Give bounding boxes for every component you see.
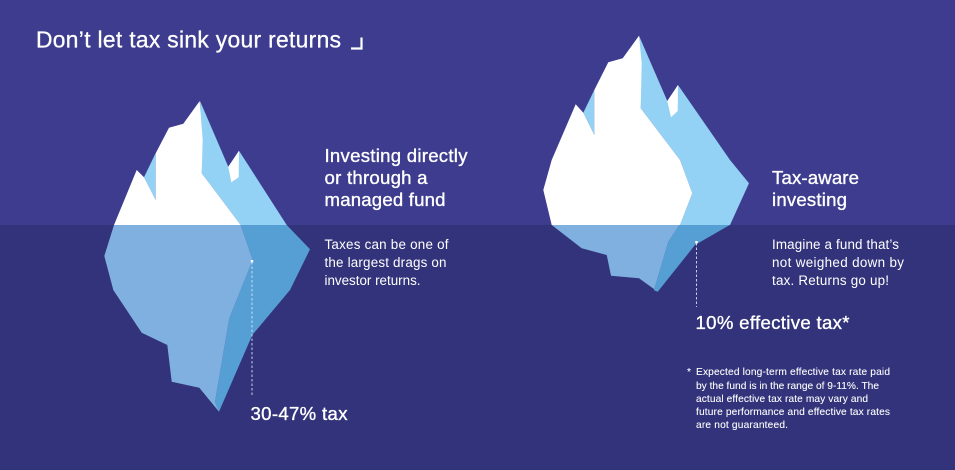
- heading: tax-aware investing: investing: [772, 189, 847, 210]
- heading: investing directly: managed fund: [324, 189, 446, 210]
- icon: corner bracket: [351, 38, 362, 48]
- text block: imagine a fund: Imagine a fund that’s: [772, 237, 899, 252]
- title: Don’t let tax sink your returns: [36, 26, 341, 52]
- text block: taxes drag: investor returns.: [324, 273, 420, 288]
- footnote: are not guaranteed.: [696, 420, 788, 431]
- footnote: actual effective tax rate may vary and: [696, 394, 868, 405]
- footnote: *: [687, 367, 691, 378]
- text block: imagine a fund: [772, 237, 904, 288]
- label: 10% effective tax: 10% effective tax*: [696, 312, 850, 333]
- text block: imagine a fund: not weighed down by: [772, 255, 904, 270]
- iceberg: right: [543, 36, 749, 292]
- leader line: left: [251, 260, 253, 397]
- heading: investing directly: Investing directly: [324, 145, 468, 166]
- label: 30-47% tax: 30-47% tax: [250, 403, 348, 424]
- footnote: by the fund is in the range of 9-11%. The: [696, 381, 879, 392]
- footnote: [687, 367, 890, 431]
- text block: taxes drag: [324, 237, 449, 288]
- background: sky: [0, 0, 955, 225]
- background: water: [0, 225, 955, 470]
- heading: investing directly: or through a: [324, 167, 428, 188]
- text block: taxes drag: Taxes can be one of: [324, 237, 449, 252]
- iceberg: left: [104, 101, 310, 412]
- text block: imagine a fund: tax. Returns go up!: [772, 273, 889, 288]
- leader line: right: [695, 241, 698, 307]
- text block: taxes drag: the largest drags on: [324, 255, 446, 270]
- footnote: Expected long-term effective tax rate paid: [696, 367, 890, 378]
- heading: tax-aware investing: Tax-aware: [772, 167, 859, 188]
- footnote: future performance and effective tax rates: [696, 407, 890, 418]
- heading: tax-aware investing: [772, 167, 859, 210]
- heading: investing directly: [324, 145, 468, 210]
